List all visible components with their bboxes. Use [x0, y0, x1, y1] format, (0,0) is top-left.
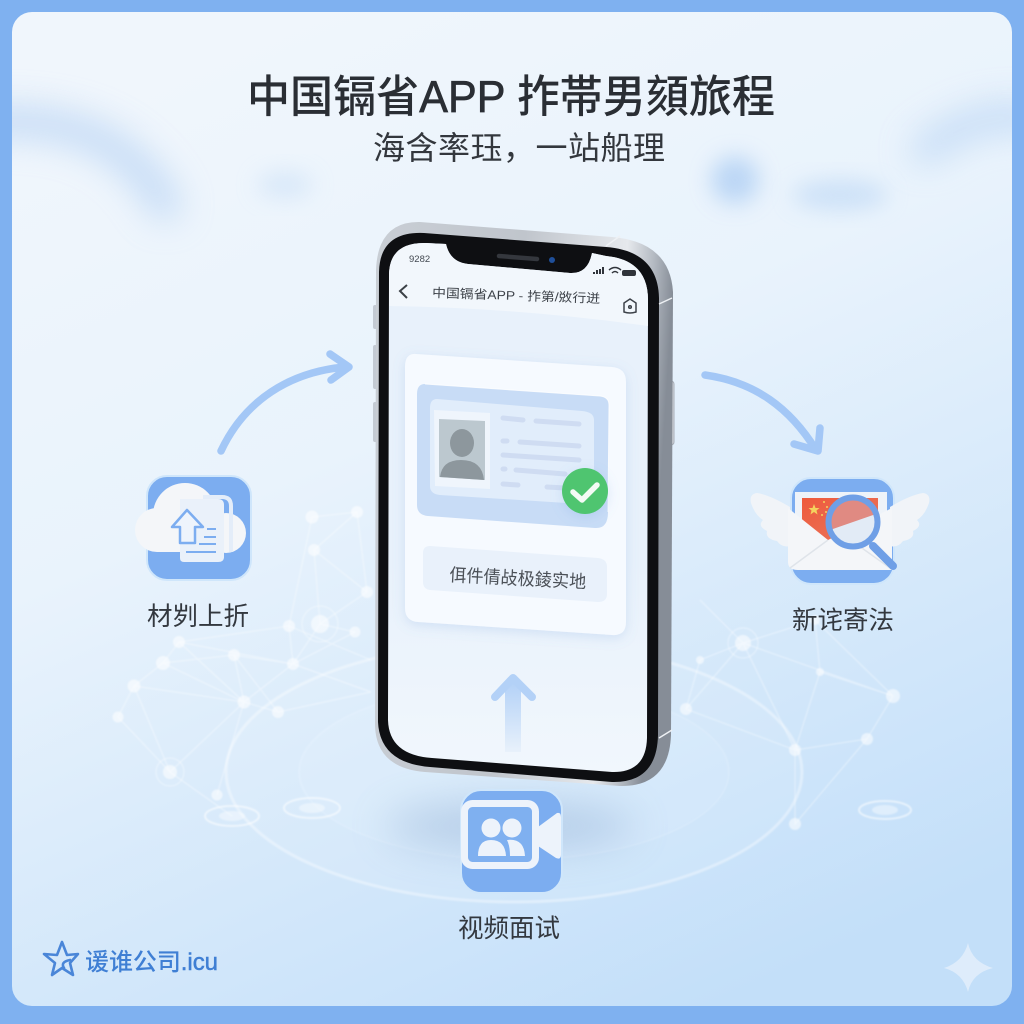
- status pill: [423, 546, 607, 602]
- logo text: 谖谁公司.icu: [85, 949, 218, 976]
- ID card: [417, 384, 609, 528]
- phone bezel: [378, 233, 659, 782]
- left curved arrow: [221, 354, 349, 451]
- sparkle: [944, 943, 993, 992]
- label: video interview: 视频面试: [458, 915, 560, 943]
- step: visa mail: [751, 478, 929, 635]
- phone ground shadow: [385, 802, 635, 850]
- icon: winged envelope with magnifier: [751, 478, 929, 584]
- back chevron: [400, 285, 407, 298]
- portrait: [440, 429, 484, 480]
- phone body: [375, 222, 673, 786]
- label: material upload: 材刿上折: [147, 603, 249, 631]
- photo frame: [434, 410, 490, 489]
- status icons: [594, 267, 636, 276]
- network and ring decoration: [112, 506, 911, 902]
- app header title: 中国镉省APP - 拃第/敚行迸: [432, 285, 601, 306]
- header home icon: [624, 299, 636, 313]
- photo: [439, 419, 485, 480]
- label: visa mail: 新诧寄法: [792, 607, 894, 635]
- card text lines: [503, 418, 579, 488]
- step: video interview: [458, 790, 562, 943]
- logo: [44, 942, 218, 976]
- app header: [389, 243, 648, 326]
- title: 中国镉省APP 拃帯男頦旅程: [247, 73, 775, 122]
- green check badge: [562, 468, 608, 514]
- up arrow: [495, 678, 532, 752]
- phone side buttons: [373, 305, 674, 445]
- icon: video camera: [461, 790, 562, 893]
- status pill text: 佴件倩敁极錂实地: [449, 565, 587, 592]
- blurred background shapes: [0, 117, 1024, 210]
- step: material upload: [135, 476, 251, 631]
- front camera: [549, 257, 555, 263]
- phone: [373, 222, 674, 786]
- status time: 9282: [409, 254, 430, 265]
- ID card inner: [430, 399, 594, 504]
- antenna seams: [606, 236, 672, 738]
- right curved arrow: [705, 375, 820, 451]
- card panel: [405, 354, 626, 635]
- phone screen: [388, 243, 648, 772]
- icon: cloud upload: [135, 476, 251, 580]
- subtitle: 海含率珏，一站船理: [373, 130, 665, 166]
- icon: logo star: [44, 942, 78, 975]
- notch speaker: [499, 256, 537, 259]
